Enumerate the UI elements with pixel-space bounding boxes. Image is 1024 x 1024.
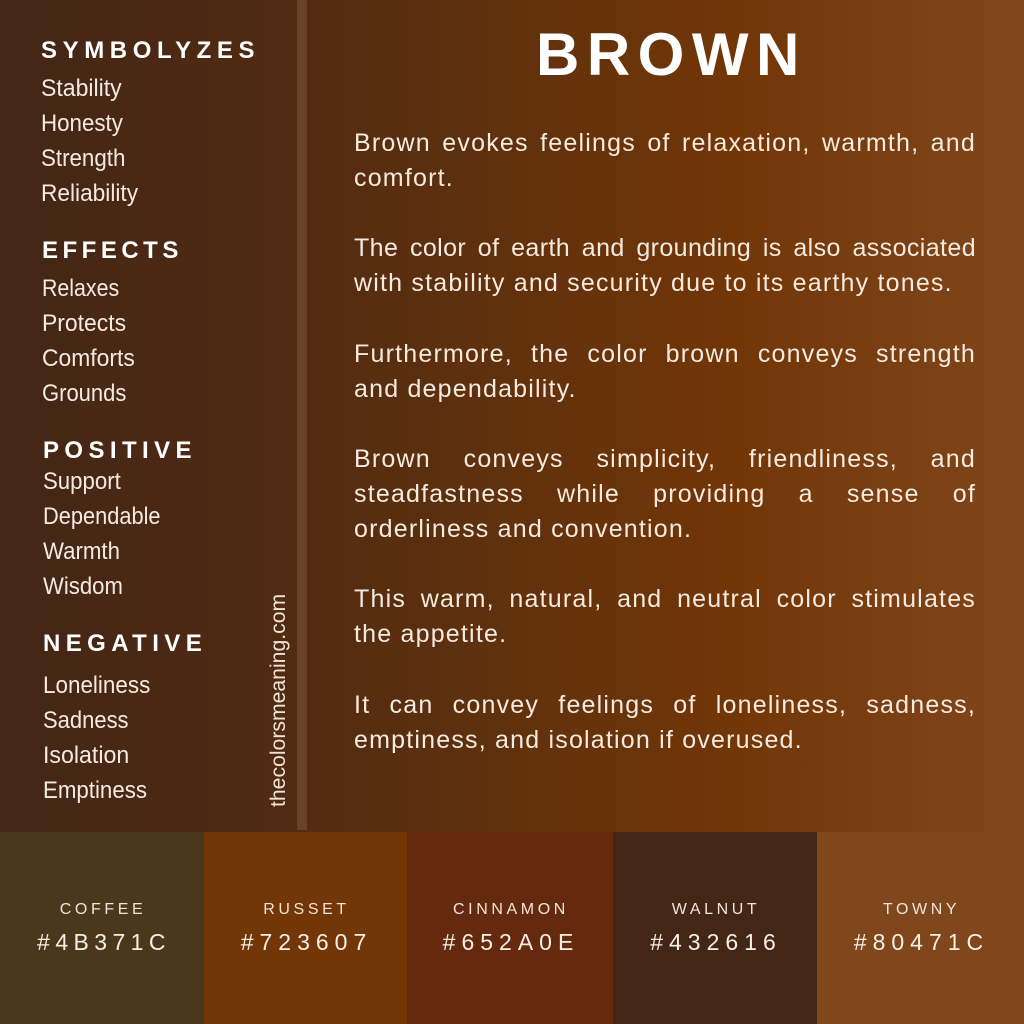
list: negative: Isolation [43,742,129,769]
list: negative: Sadness [43,707,129,734]
list: negative [43,672,150,804]
swatch: towny: TOWNY [883,901,960,918]
paragraph 4: orderliness and convention. [354,515,692,543]
list: positive [43,468,161,600]
panel: effects [42,237,183,407]
swatch: cinnamon: CINNAMON [453,901,569,918]
panel: symbolizes [41,37,260,207]
swatch: coffee: COFFEE [60,901,146,918]
swatch: towny [817,832,1024,1024]
list: effects: Relaxes [42,275,119,302]
swatch: cinnamon [407,832,613,1024]
paragraph 6: emptiness, and isolation if overused. [354,726,803,754]
list: symbolizes: Honesty [41,110,123,137]
list: positive: Support [43,468,121,495]
list: symbolizes: Reliability [41,180,138,207]
list: negative: Emptiness [43,777,147,804]
swatch: russet: RUSSET [263,901,350,918]
paragraph 4: steadfastness while providing a sense of [354,480,976,508]
swatch: russet: #723607 [241,929,372,955]
divider bar [297,0,307,830]
swatch: walnut: WALNUT [672,901,760,918]
paragraph 4: Brown conveys simplicity, friendliness, and [354,445,976,473]
text block: description [354,129,976,754]
list: positive: Warmth [43,538,120,565]
list: negative: Loneliness [43,672,150,699]
paragraph 3: Furthermore, the color brown conveys strength [354,340,976,368]
panel: positive [43,437,197,600]
paragraph 1: comfort. [354,164,454,192]
paragraph 3: and dependability. [354,375,577,403]
list: symbolizes: Stability [41,75,122,102]
list: effects: Grounds [42,380,126,407]
swatch: russet [204,832,407,1024]
paragraph 4 [354,445,976,543]
paragraph 6 [354,691,976,754]
swatch: coffee: #4B371C [37,929,171,955]
swatch: towny: #80471C [854,929,989,955]
paragraph 3 [354,340,976,403]
list: effects [42,275,135,407]
list: effects: Comforts [42,345,135,372]
paragraph 6: It can convey feelings of loneliness, sadness, [354,691,976,719]
swatch: walnut [613,832,817,1024]
heading: symbolizes: SYMBOLYZES [41,37,260,64]
list: symbolizes [41,75,138,207]
panel: negative [43,630,207,804]
heading: effects: EFFECTS [42,237,183,264]
paragraph 1 [354,129,976,192]
heading: positive: POSITIVE [43,437,197,464]
list: symbolizes: Strength [41,145,125,172]
title: BROWN [536,21,807,88]
swatch: walnut: #432616 [650,929,782,955]
list: effects: Protects [42,310,126,337]
swatch: coffee [0,832,204,1024]
heading: negative: NEGATIVE [43,630,207,657]
paragraph 2 [354,234,976,297]
paragraph 1: Brown evokes feelings of relaxation, warmth, and [354,129,976,157]
paragraph 5: the appetite. [354,620,507,648]
paragraph 5 [354,585,976,648]
list: positive: Dependable [43,503,161,530]
swatch: cinnamon: #652A0E [443,929,579,955]
paragraph 2: with stability and security due to its earthy tones. [354,269,953,297]
paragraph 2: The color of earth and grounding is also associated [354,234,976,262]
list: positive: Wisdom [43,573,123,600]
paragraph 5: This warm, natural, and neutral color stimulates [354,585,976,613]
website label: thecolorsmeaning.com [267,594,290,807]
